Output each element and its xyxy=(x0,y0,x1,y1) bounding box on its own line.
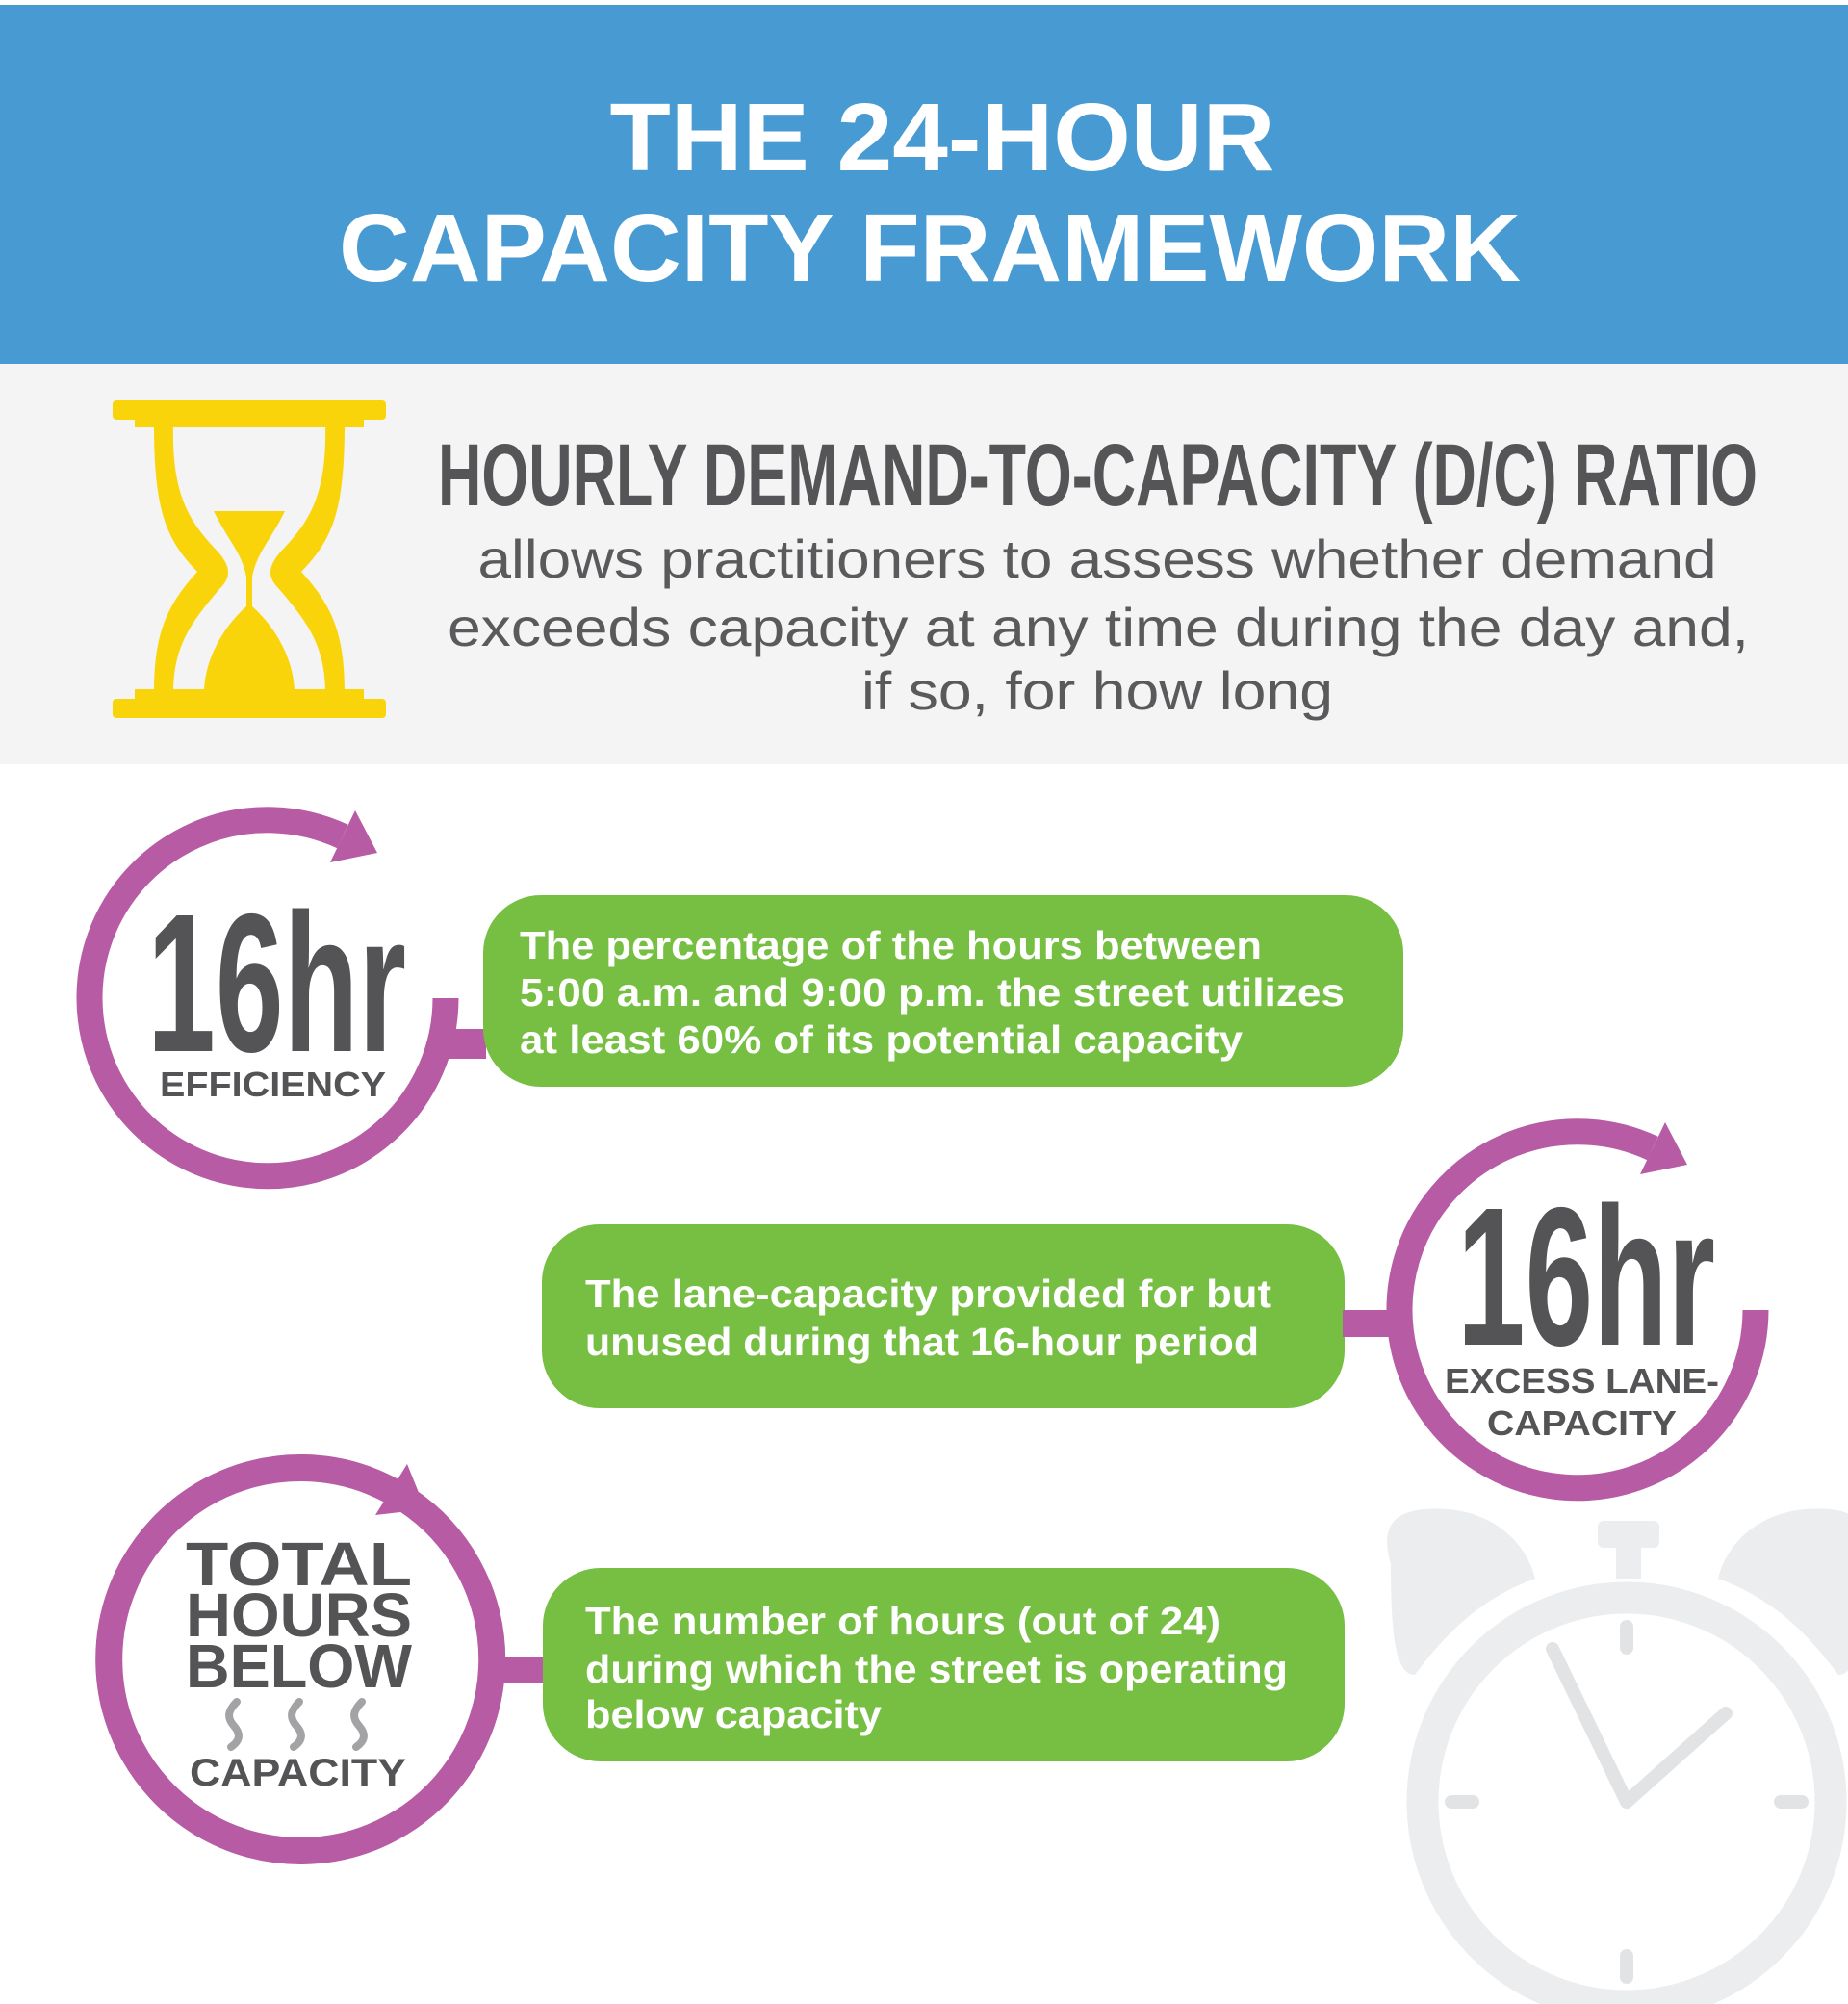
circle: 16hr efficiency: 16hr xyxy=(147,873,406,1093)
circle: total hours below capacity xyxy=(109,1464,544,1851)
panel: D/C ratio intro xyxy=(0,364,1848,764)
circle: total hours below capacity: BELOW xyxy=(186,1631,413,1701)
box: excess lane-capacity description: unused during that 16-hour period xyxy=(585,1320,1259,1364)
title: CAPACITY FRAMEWORK xyxy=(339,194,1521,302)
circle: 16hr excess lane-capacity xyxy=(1399,1122,1756,1488)
box: total hours below capacity description: below capacity xyxy=(585,1692,882,1736)
icon: hourglass xyxy=(113,400,386,718)
box: total hours below capacity description: The number of hours (out of 24) xyxy=(585,1599,1220,1643)
box: efficiency description: 5:00 a.m. and 9:00 p.m. the street utilizes xyxy=(520,970,1345,1015)
title xyxy=(339,84,1521,302)
description text: exceeds capacity at any time during the day and, xyxy=(448,597,1749,657)
icon: heat squiggles xyxy=(229,1702,364,1747)
circle: 16hr efficiency: EFFICIENCY xyxy=(160,1065,386,1104)
box: efficiency description: The percentage of the hours between xyxy=(520,923,1262,967)
description text: allows practitioners to assess whether demand xyxy=(477,528,1717,589)
icon: alarm clock watermark xyxy=(1387,1509,1848,2004)
circle: total hours below capacity: TOTAL xyxy=(186,1529,412,1599)
box: excess lane-capacity description: The lane-capacity provided for but xyxy=(585,1272,1271,1316)
box: excess lane-capacity description xyxy=(542,1224,1396,1408)
box: efficiency description: at least 60% of its potential capacity xyxy=(520,1017,1243,1062)
circle: 16hr excess lane-capacity: CAPACITY xyxy=(1487,1403,1677,1443)
description text: if so, for how long xyxy=(861,660,1333,721)
header band xyxy=(0,5,1848,364)
circle: 16hr excess lane-capacity: EXCESS LANE- xyxy=(1445,1361,1719,1400)
box: total hours below capacity description xyxy=(543,1568,1345,1761)
circle: total hours below capacity: HOURS xyxy=(186,1580,412,1650)
title: THE 24-HOUR xyxy=(610,84,1274,192)
description text xyxy=(448,528,1749,721)
box: total hours below capacity description: during which the street is operating xyxy=(585,1647,1288,1691)
circle: 16hr efficiency xyxy=(90,810,486,1176)
circle: total hours below capacity: CAPACITY xyxy=(190,1752,406,1794)
box: efficiency description xyxy=(483,895,1403,1087)
